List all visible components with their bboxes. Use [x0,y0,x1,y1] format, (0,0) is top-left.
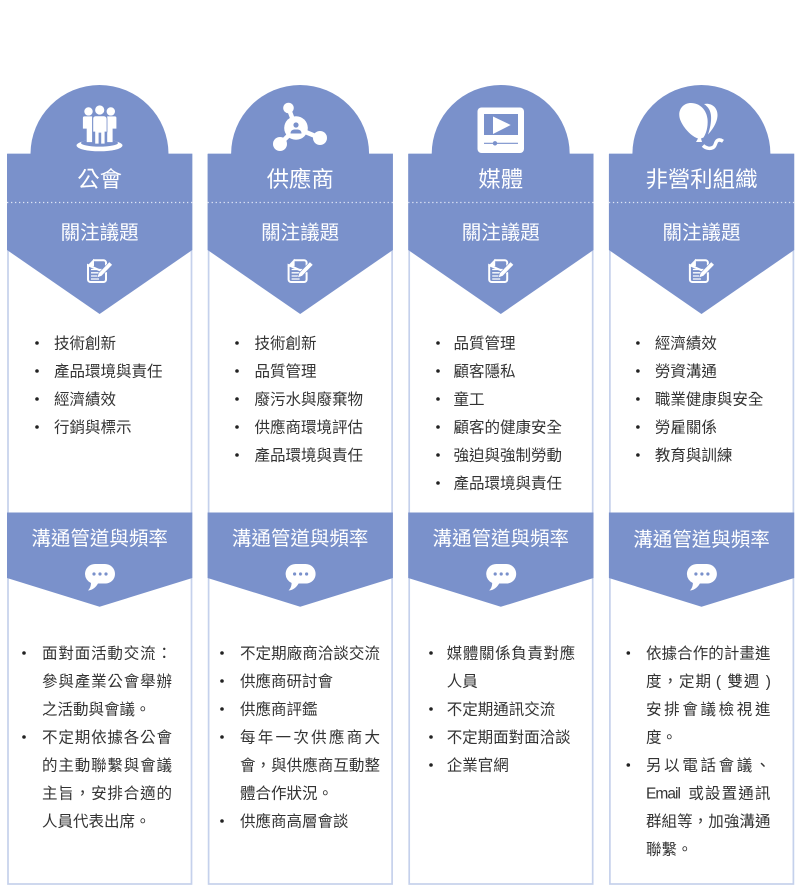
list: issues: 經濟績效 [655,334,717,352]
list: channels: 供應商評鑑 [240,700,318,718]
heading: 關注議題: 關注議題 [462,222,540,244]
panel: 媒體 [408,85,594,884]
icon: balloons [679,103,723,148]
panel: 公會 [7,85,192,884]
list: issues: 品質管理 [255,362,317,380]
icon: document [690,260,714,282]
list: channels: 供應商高層會談 [240,812,349,830]
icon: speech bubble [286,564,316,590]
icon: network [273,103,327,151]
list: issues: 童工 [454,390,485,408]
panel: 非營利組織 [609,85,794,884]
band: 溝通管道與頻率 [408,512,594,607]
list: channels: 的主動聯繫與會議 [42,756,172,774]
list: channels: 或設置通訊 [688,784,770,802]
list: issues: 技術創新 [54,334,116,352]
header band: 關注議題 [609,154,794,314]
list: channels: ( 雙週 ) [716,672,771,690]
list: channels: 供應商研討會 [240,672,334,690]
list: channels: 面對面活動交流： [42,644,172,662]
list: channels: Email [646,786,681,802]
list: channels: 度，定期 [646,672,711,690]
list: channels: 不定期依據各公會 [42,728,172,746]
list: channels: 人員 [447,672,478,690]
list: issues: 經濟績效 [54,390,116,408]
list: issues: 行銷與標示 [54,418,132,436]
dotted divider [408,202,594,204]
list: issues: 顧客隱私 [454,362,516,380]
band: 溝通管道與頻率 [7,512,192,607]
list: channels [220,644,380,830]
header dome [30,85,168,154]
list: channels: 之活動與會議。 [42,700,151,718]
panel: 供應商 [208,85,393,884]
list: issues [436,334,562,492]
list: channels: 度。 [646,728,677,746]
icon: speech bubble [85,564,115,590]
list: issues: 勞資溝通 [655,362,717,380]
list: channels: 群組等，加強溝通 [646,812,771,830]
icon: document [489,260,514,282]
heading: 溝通管道與頻率: 溝通管道與頻率 [232,528,368,550]
dotted divider [208,202,393,204]
band: 溝通管道與頻率 [609,512,794,607]
list: issues [35,334,163,436]
list: issues: 廢污水與廢棄物 [255,390,363,408]
list: channels: 企業官網 [447,756,509,774]
list: channels: 體合作狀況。 [240,784,333,802]
list: issues: 強迫與強制勞動 [454,446,562,464]
icon: speech bubble [486,564,516,590]
list: channels [626,644,771,858]
list: channels: 不定期廠商洽談交流 [240,644,380,662]
list: channels: 另以電話會議、 [646,756,771,774]
list: issues: 教育與訓練 [655,446,732,464]
list: issues: 顧客的健康安全 [454,418,562,436]
list: channels: 參與產業公會舉辦 [42,672,172,690]
list: channels: 媒體關係負責對應 [447,644,575,662]
heading: 溝通管道與頻率: 溝通管道與頻率 [31,528,168,550]
title: 公會 [77,167,122,192]
icon: people [76,105,122,151]
header dome [231,85,369,154]
header band: 關注議題 [408,154,594,314]
heading: 溝通管道與頻率: 溝通管道與頻率 [433,528,569,550]
header dome [632,85,770,154]
list: issues: 職業健康與安全 [655,390,763,408]
list: channels [429,644,575,774]
dotted divider [7,202,192,204]
list: issues: 供應商環境評估 [255,418,363,436]
heading: 關注議題: 關注議題 [261,222,339,244]
list: channels: 每年一次供應商大 [240,728,380,746]
list: channels [22,644,172,830]
list: channels: 人員代表出席。 [42,812,151,830]
list: issues: 產品環境與責任 [454,474,562,492]
list: issues: 產品環境與責任 [255,446,363,464]
header band: 關注議題 [208,154,393,314]
list: issues: 技術創新 [255,334,317,352]
icon: document [289,260,313,282]
list: issues: 勞雇關係 [655,418,717,436]
list: issues [235,334,363,464]
icon: document [88,260,112,282]
title: 非營利組織 [646,167,757,192]
list: channels: 依據合作的計畫進 [646,644,771,662]
list: issues [636,334,763,464]
list: issues: 產品環境與責任 [54,362,163,380]
dotted divider [609,202,794,204]
title: 供應商 [267,167,334,192]
band: 溝通管道與頻率 [208,512,393,607]
heading: 關注議題: 關注議題 [662,222,741,244]
list: channels: 聯繫。 [646,840,693,858]
list: channels: 安排會議檢視進 [646,700,771,718]
icon: video player [478,108,524,153]
list: channels: 不定期通訊交流 [447,700,555,718]
list: channels: 主旨，安排合適的 [42,784,172,802]
header dome [432,85,570,154]
heading: 關注議題: 關注議題 [61,222,139,244]
list: issues: 品質管理 [454,334,516,352]
list: channels: 不定期面對面洽談 [447,728,571,746]
header band: 關注議題 [7,154,192,314]
heading: 溝通管道與頻率: 溝通管道與頻率 [633,529,770,551]
icon: speech bubble [687,564,717,590]
list: channels: 會，與供應商互動整 [240,756,380,774]
title: 媒體 [478,167,523,192]
